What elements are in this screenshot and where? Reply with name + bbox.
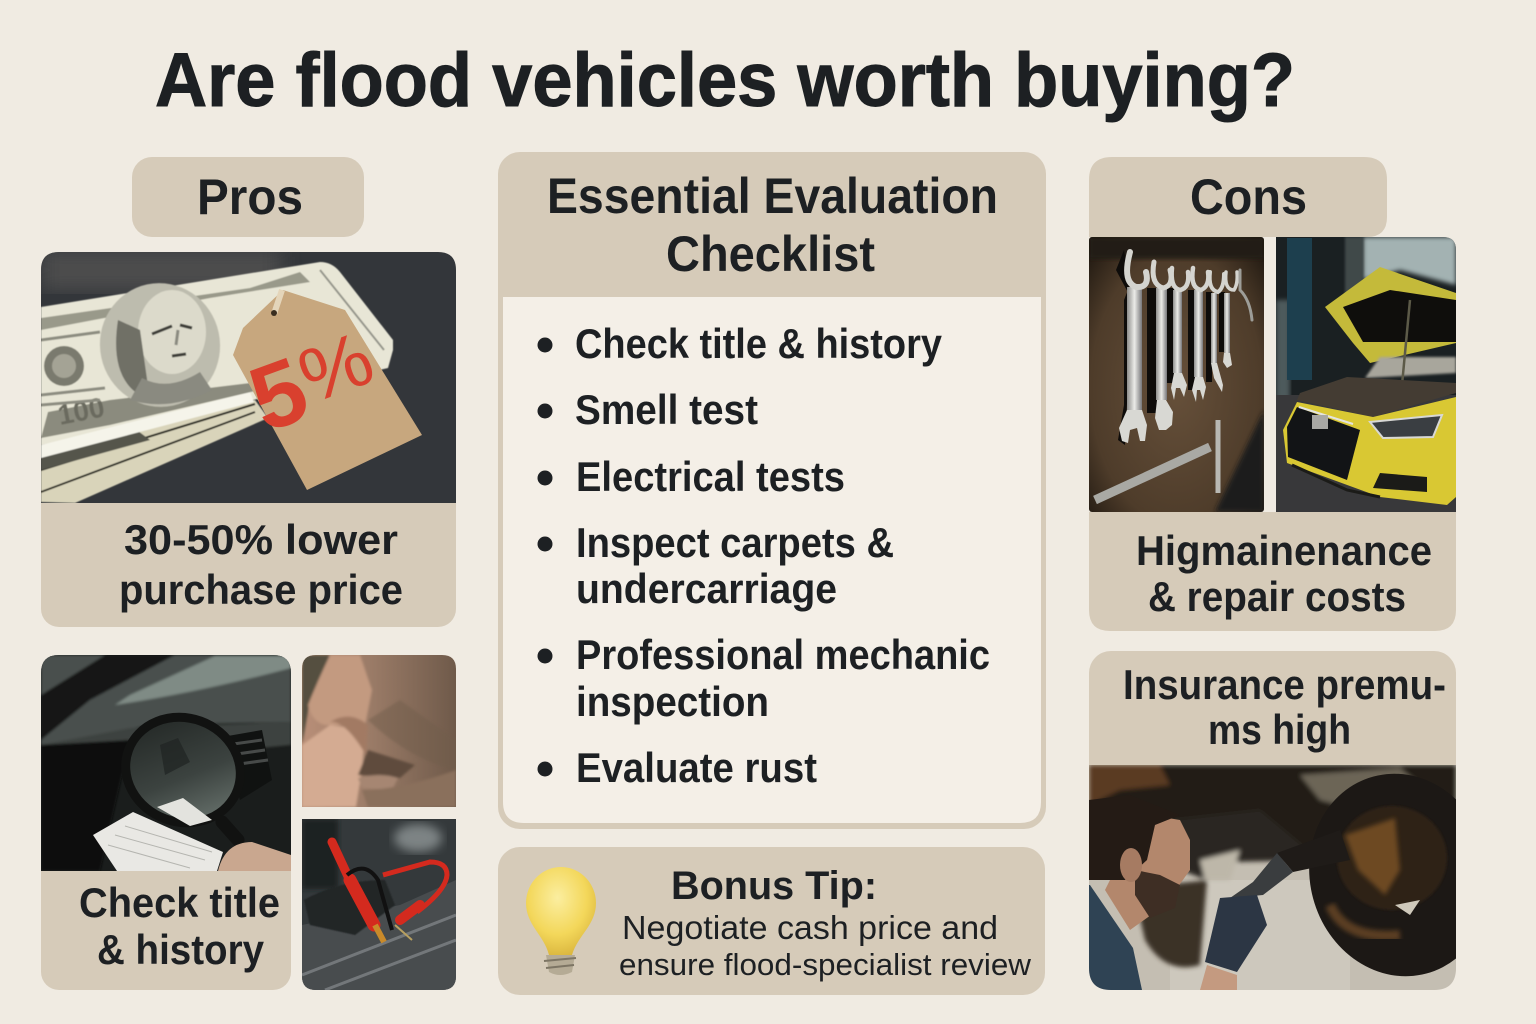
title: Are flood vehicles worth buying? [155,38,1295,123]
photo: red electrical test probes [302,819,456,990]
wrench shadows [1116,250,1225,445]
panel: pros heading: Pros [197,169,303,225]
panel: lower purchase price [41,250,456,627]
checklist items: inspection [576,678,769,725]
checklist items: Smell test [575,386,758,433]
icon: light bulb [526,867,596,975]
photo: mechanic inspecting rust under car [1089,765,1456,990]
checklist items [538,320,990,791]
panel: bonus tip [498,847,1045,995]
photo: cash with 50% tag: 100 [55,392,107,431]
checklist items: Evaluate rust [576,744,817,791]
heading: Bonus Tip: [671,864,877,908]
photo: cash with 50% tag [41,250,456,503]
checklist items: Check title & history [575,320,943,367]
checklist items: Inspect carpets & [576,519,894,566]
panel: essential evaluation checklist [498,152,1046,829]
panel: check title and history: & history [97,926,265,973]
photo: wrenches on wall [1089,237,1264,512]
panel: essential evaluation checklist: Checklist [666,226,875,282]
caption: Check title [79,879,280,926]
panel: lower purchase price: purchase price [119,566,403,613]
heading: Essential Evaluation [547,168,998,224]
panel: insurance premiums high: ms high [1208,706,1351,753]
tip text: Negotiate cash price and [622,909,998,946]
engraved portrait [100,282,220,408]
photo: cash with 50% tag: % [288,315,384,420]
photo: magnifying glass over document [41,655,291,871]
checklist items: Electrical tests [576,453,845,500]
photo: yellow car with open hood [1276,237,1456,512]
photo: nose smell test [302,655,456,807]
panel: insurance premiums high [1089,651,1456,990]
photo: cash with 50% tag: 5 [237,338,321,452]
panel: bonus tip: ensure flood-specialist review [619,947,1032,982]
checklist items: Professional mechanic [576,631,990,678]
panel: check title and history [41,655,291,990]
panel: cons heading [1089,157,1387,237]
caption: Higmainenance [1136,527,1432,574]
caption: Insurance premu- [1123,661,1446,708]
caption: 30-50% lower [124,516,398,563]
panel: pros heading [132,157,364,237]
panel: cons heading: Cons [1190,169,1307,225]
kraft tag [233,290,422,490]
checklist items: undercarriage [576,565,837,612]
panel: maintenance and repair costs: & repair costs [1148,573,1406,620]
panel: maintenance and repair costs [1089,237,1456,631]
